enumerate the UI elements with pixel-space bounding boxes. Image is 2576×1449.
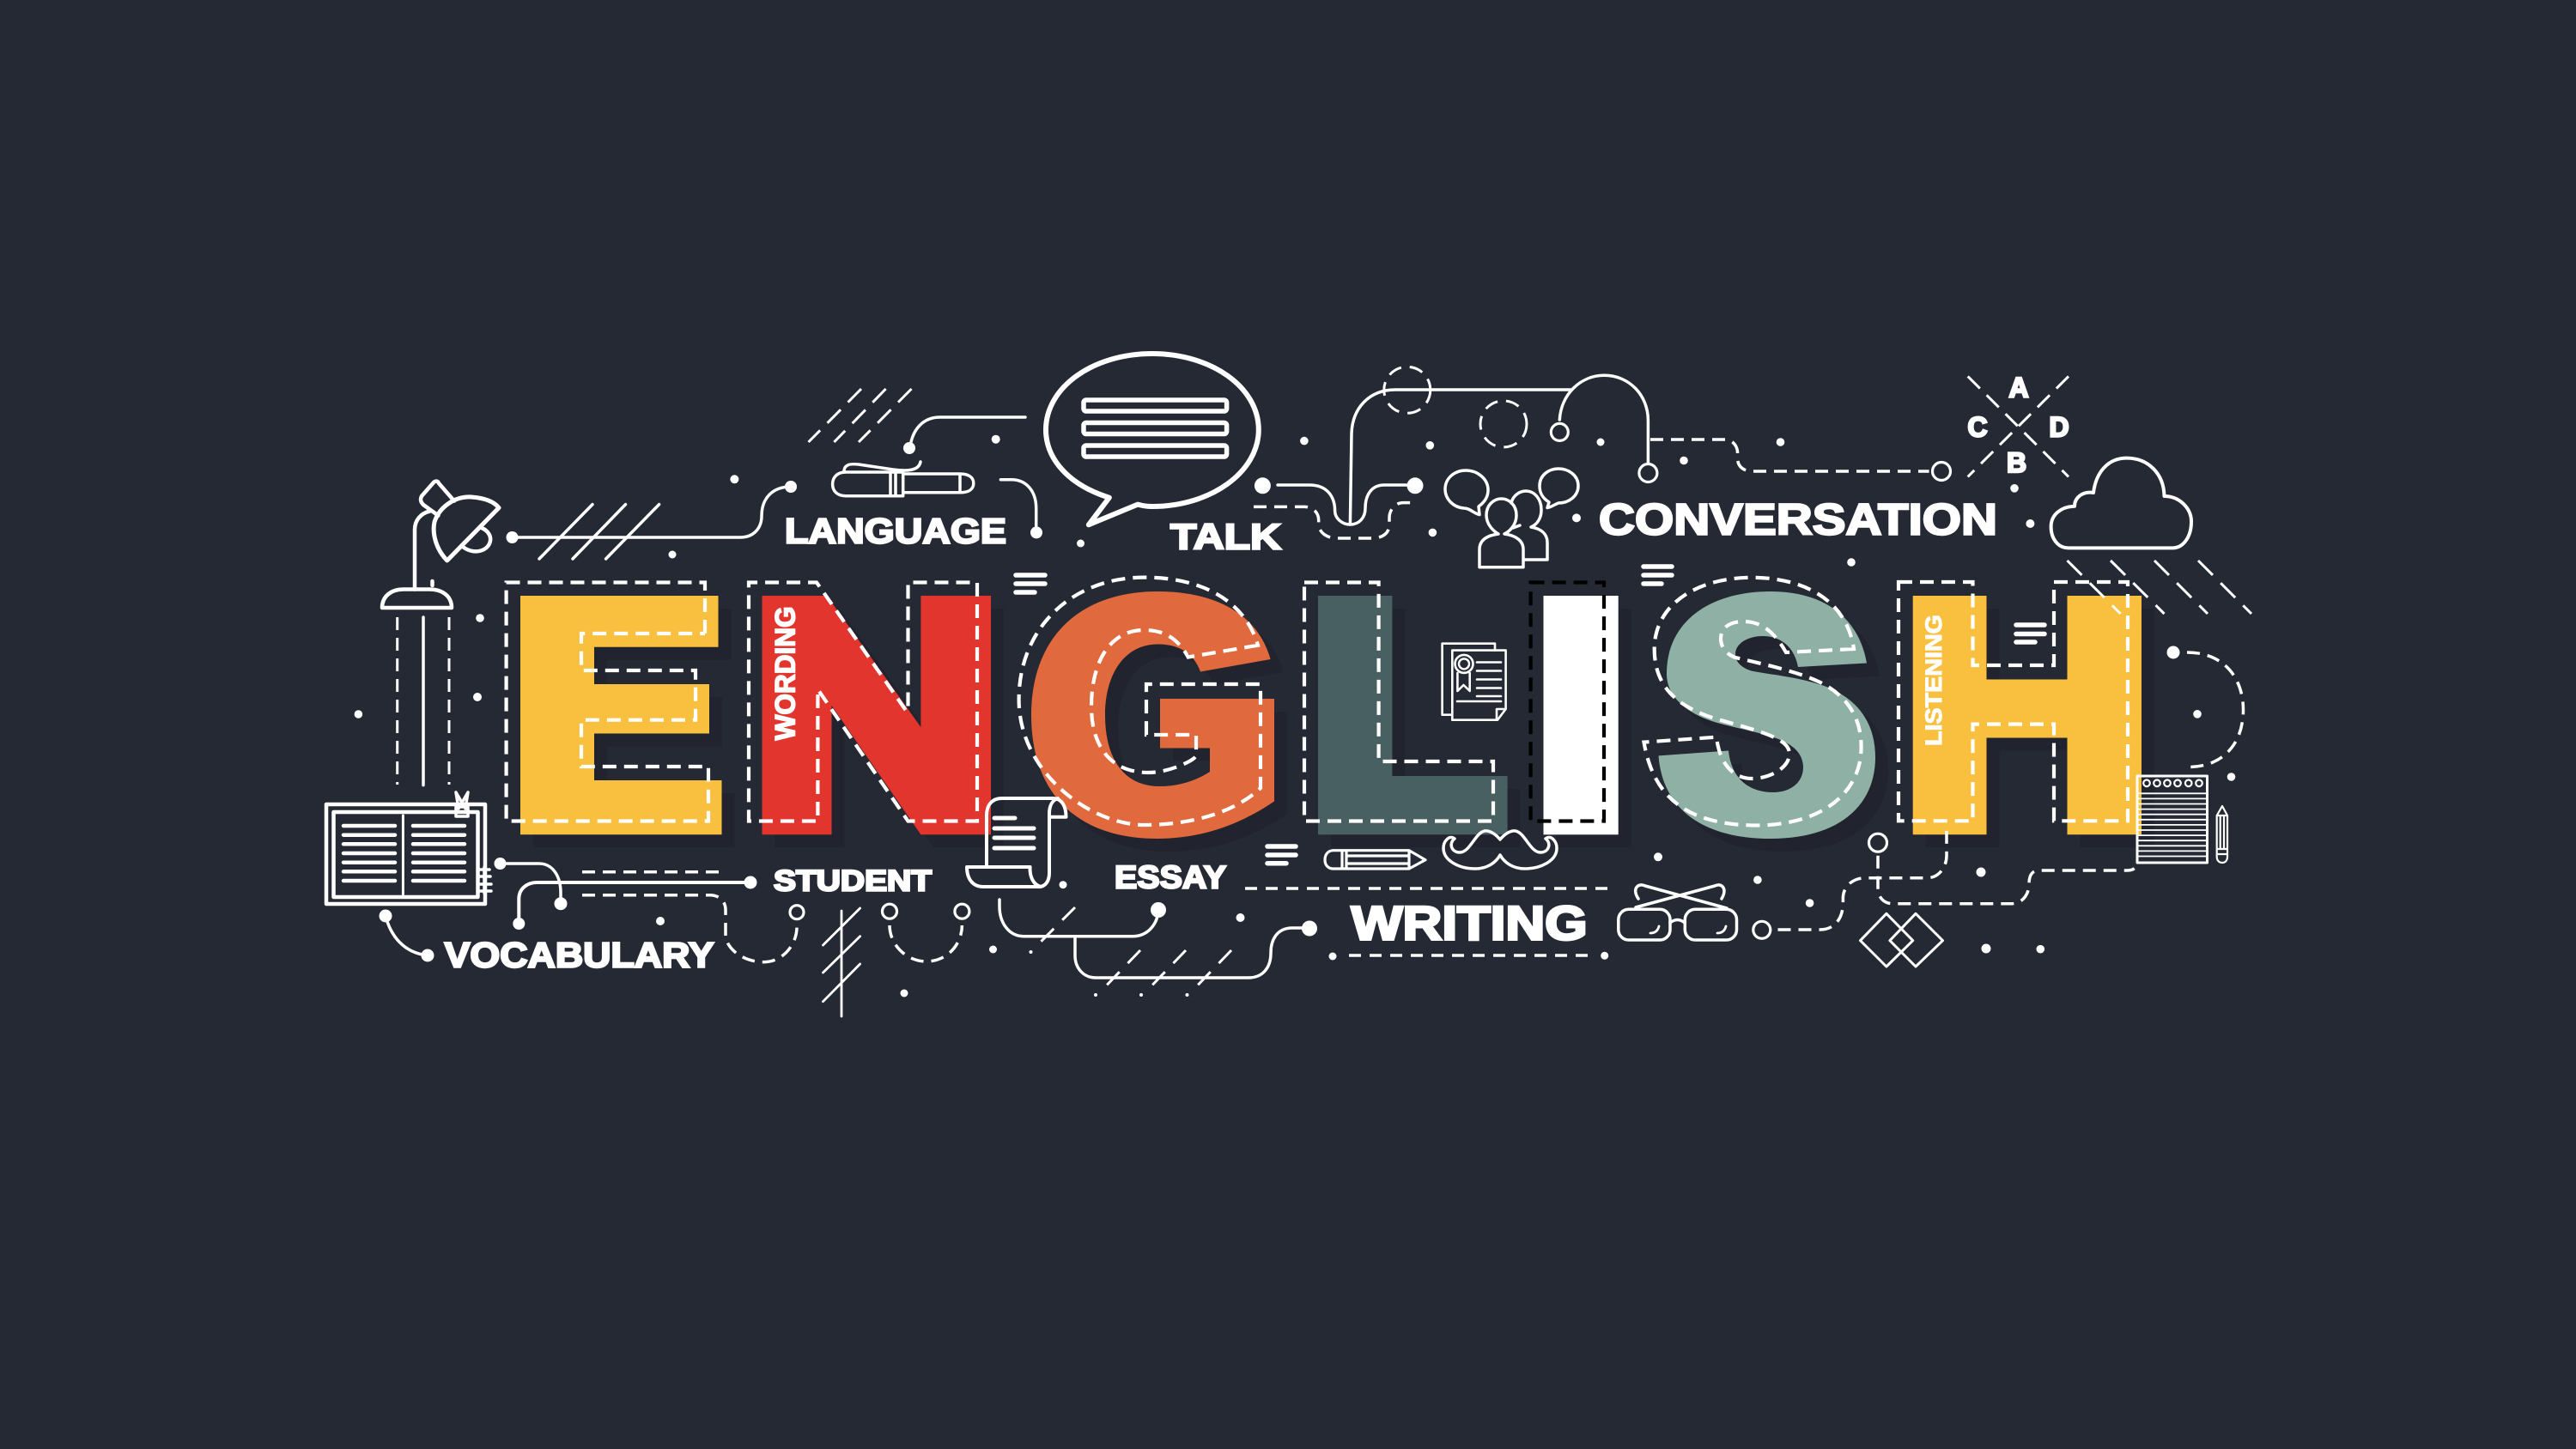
dashed outline L <box>1304 582 1493 821</box>
book connectors <box>380 858 804 962</box>
scattered dots <box>355 435 2235 997</box>
icon: people with speech bubbles <box>1445 469 1578 567</box>
icon: slim pencil <box>2217 806 2227 863</box>
icon: paper scroll <box>967 798 1066 887</box>
dashed diagonal hatch <box>809 389 912 442</box>
letters A B C D with dashed cross: A <box>2008 373 2029 403</box>
icon: moustache <box>1443 831 1557 869</box>
connector after language <box>1000 480 1042 538</box>
icon: pencil <box>1325 851 1425 869</box>
letter S <box>1659 591 1875 839</box>
student decorative loop <box>883 904 969 961</box>
icon: marker pen <box>833 462 974 496</box>
dashed rule below writing <box>1329 952 1608 960</box>
vertical label WORDING: WORDING <box>769 606 800 740</box>
letter N <box>762 596 991 834</box>
dashed outline G <box>1019 578 1261 825</box>
letter I <box>1544 596 1619 834</box>
icon: glasses <box>1619 885 1736 940</box>
dashed connector to conversation <box>1650 440 1951 481</box>
hash mark <box>823 908 860 1016</box>
letters A B C D with dashed cross <box>1967 373 2069 478</box>
dashed outline S <box>1643 578 1862 826</box>
letter G <box>1031 591 1274 839</box>
icon: text lines <box>1016 567 2044 864</box>
letters A B C D with dashed cross: D <box>2049 412 2069 443</box>
icon: speech bubble <box>1046 354 1259 524</box>
heading LANGUAGE: LANGUAGE <box>785 512 1006 551</box>
icon: open book <box>326 792 491 904</box>
heading CONVERSATION: CONVERSATION <box>1599 494 1997 544</box>
connector with slashes from lamp to language <box>507 481 797 559</box>
vertical label LISTENING: LISTENING <box>1921 615 1947 746</box>
heading ESSAY: ESSAY <box>1115 860 1226 894</box>
essay connectors <box>999 900 1317 989</box>
heading STUDENT: STUDENT <box>774 865 932 898</box>
dot beside dashed curve <box>2167 646 2179 659</box>
letter E <box>520 596 721 834</box>
dashed rule above writing <box>1245 887 1611 890</box>
icon: notepad <box>2137 776 2207 863</box>
heading TALK: TALK <box>1170 517 1281 556</box>
big word ENGLISH <box>520 591 2142 839</box>
connector to speech bubble <box>903 417 1025 454</box>
dashed rain lines <box>2068 561 2251 614</box>
dashed curve right of H <box>2187 652 2243 767</box>
icon: certificate <box>1443 644 1506 720</box>
talk connectors <box>1254 367 1657 538</box>
letters A B C D with dashed cross: C <box>1967 412 1988 443</box>
letter L <box>1318 596 1508 834</box>
icon: cloud <box>2051 458 2191 548</box>
dashed outline E <box>507 582 708 821</box>
dashed outline N <box>749 582 977 821</box>
dashed outline H <box>1899 582 2128 821</box>
dashed connectors bottom right <box>1753 824 2135 938</box>
dashed outline I <box>1531 582 1604 821</box>
letters A B C D with dashed cross: B <box>2007 447 2026 478</box>
dashed letter outlines <box>507 578 2128 826</box>
heading WRITING: WRITING <box>1352 896 1588 949</box>
letter H <box>1913 596 2142 834</box>
icon: overlapping diamonds <box>1860 913 1942 967</box>
icon: desk lamp <box>382 482 499 785</box>
heading VOCABULARY: VOCABULARY <box>445 936 714 975</box>
